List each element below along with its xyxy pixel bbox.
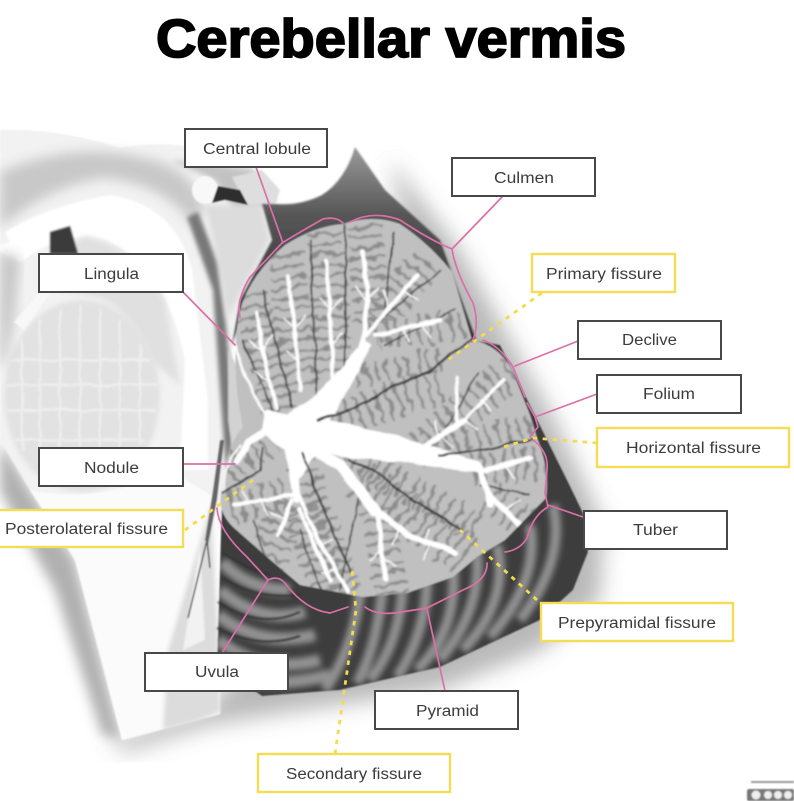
primary fissure — [318, 340, 473, 420]
central white core — [262, 340, 490, 490]
label: Folium — [597, 375, 741, 413]
pink bracket and leader: declive — [483, 340, 578, 397]
pale wedge beside lingula — [228, 350, 272, 450]
pink bracket and leader: folium — [527, 394, 597, 437]
pons striated oval — [4, 300, 160, 492]
soft shadow along medulla left edge — [0, 440, 122, 740]
pale lump under central lobule box — [232, 170, 280, 205]
small white twigs into folia — [242, 286, 520, 572]
white matter branches — [224, 252, 530, 592]
label: Nodule — [39, 448, 183, 486]
midbrain base tone — [0, 130, 290, 740]
pale tissue beside ventricle band — [205, 205, 270, 320]
white arc of the pons — [5, 195, 208, 470]
gray cortex fill — [210, 210, 555, 610]
label: Culmen: Culmen — [494, 170, 554, 187]
soft shadow behind cerebellum — [110, 160, 604, 752]
medulla — [30, 470, 220, 740]
label: Posterolateral fissure: Posterolateral fissure — [5, 521, 168, 538]
cerebellar arbor vitae — [210, 210, 555, 610]
secondary fissure — [303, 453, 352, 572]
label: Declive: Declive — [622, 332, 677, 349]
brainstem and midbrain — [0, 101, 352, 740]
label: Horizontal fissure: Horizontal fissure — [626, 440, 761, 457]
label: Posterolateral fissure — [0, 510, 183, 547]
inner gray of arc — [50, 236, 180, 385]
round colliculus, white — [258, 101, 352, 195]
label: Prepyramidal fissure — [541, 603, 733, 641]
white fold at left edge — [0, 232, 42, 262]
label: Secondary fissure — [258, 754, 450, 792]
dark seams on lower left folia — [217, 553, 300, 641]
label: Horizontal fissure — [597, 428, 789, 467]
label: Tuber: Tuber — [633, 522, 678, 539]
label: Pyramid: Pyramid — [416, 703, 479, 720]
label: Tuber — [584, 511, 727, 549]
label: Pyramid — [375, 691, 518, 729]
dark sulci between lobules — [243, 225, 530, 590]
yellow dashed leader: primary fissure — [445, 293, 542, 362]
pink leader: nodule — [183, 463, 235, 465]
pink leader: lingula — [183, 292, 235, 345]
pink bracket and leader: culmen — [350, 196, 503, 342]
label: Nodule: Nodule — [84, 460, 139, 477]
dark strip above canal — [205, 440, 224, 545]
central canal — [188, 540, 210, 618]
label: Prepyramidal fissure: Prepyramidal fissure — [558, 615, 716, 632]
yellow dashed leader: secondary fissure — [335, 570, 356, 754]
horizontal fissure — [440, 438, 536, 456]
label: Folium: Folium — [643, 386, 695, 403]
label: Secondary fissure: Secondary fissure — [286, 766, 422, 783]
label: Primary fissure — [532, 254, 675, 292]
pink bracket and leader: pyramid — [365, 563, 487, 691]
gray tectum band — [0, 152, 205, 228]
label: Lingula — [39, 254, 183, 292]
pink bracket and leader: uvula — [217, 508, 348, 653]
yellow dashed leader: horizontal fissure — [500, 438, 597, 448]
label: Uvula — [145, 653, 288, 691]
dark upper cerebellar recess — [232, 147, 478, 345]
gray ventricle band — [187, 212, 236, 470]
label: Central lobule: Central lobule — [203, 141, 311, 158]
small dark slit — [212, 186, 248, 205]
illustration: sagittal section of brainstem and cerebellum — [0, 101, 604, 752]
medulla gray streak — [163, 505, 220, 730]
upper tectum pale patches — [170, 160, 275, 210]
lower folia stripes — [218, 505, 556, 690]
label: Culmen — [452, 158, 595, 196]
posterolateral fissure — [223, 447, 263, 493]
shaded gap under midbrain — [0, 252, 20, 370]
white inset in streak — [183, 545, 205, 650]
small pale bar below fold — [14, 292, 50, 330]
label: Lingula: Lingula — [84, 266, 139, 283]
pink bracket and leader: central lobule — [239, 167, 343, 317]
label: Declive — [578, 321, 721, 359]
small round commissure — [192, 176, 218, 204]
folia hatching — [225, 225, 548, 600]
yellow dashed leader: posterolateral fissure — [185, 480, 253, 530]
label: Central lobule — [185, 129, 327, 167]
title: Cerebellar vermis — [156, 9, 626, 69]
label: Primary fissure: Primary fissure — [546, 266, 662, 283]
dark recess behind lingula box — [50, 226, 78, 254]
yellow dashed leader: prepyramidal fissure — [460, 530, 537, 600]
label: Uvula: Uvula — [195, 664, 239, 681]
dark lower cerebellar folia body — [217, 340, 588, 696]
prepyramidal fissure — [348, 460, 462, 530]
pink bracket and leader: tuber — [505, 440, 583, 552]
icon: licence badge — [747, 781, 794, 801]
